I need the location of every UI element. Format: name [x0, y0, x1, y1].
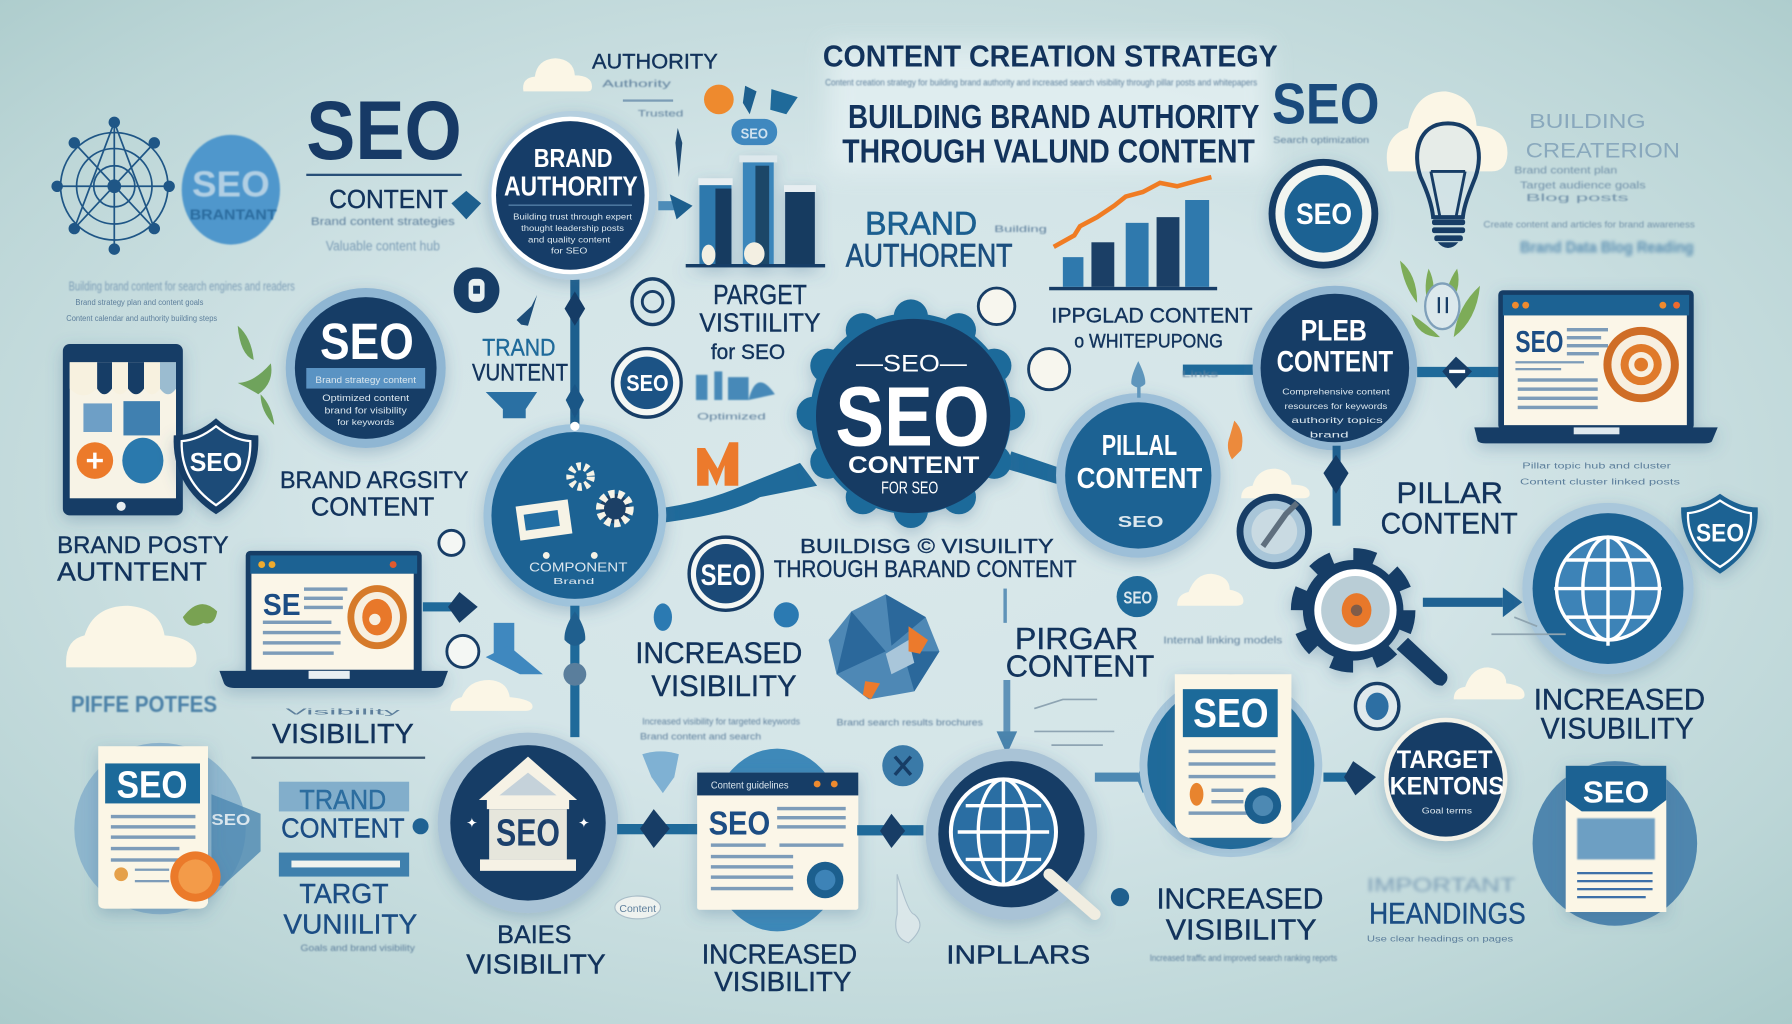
text block: authority: Trusted	[638, 109, 683, 119]
badge: SEO target ring	[1269, 159, 1378, 269]
text block: trand vontent: VUNTENT	[472, 360, 568, 387]
badge: SEO left: brand for visibility	[325, 406, 407, 416]
text block: building creation faded: Target audience goals	[1520, 181, 1646, 192]
text block: whitepapers: IPPGLAD CONTENT	[1051, 302, 1253, 327]
arrow: gear to globe	[1423, 587, 1522, 617]
text block: increased visibility middle: VISIBILITY	[651, 670, 797, 703]
text block: pirgar content	[1006, 621, 1154, 684]
icon: web doc centre: Content guidelines	[711, 781, 789, 792]
icon: plant emblem	[1400, 261, 1480, 337]
text block: increased visibility lower right	[1150, 884, 1338, 963]
badge: globe	[1522, 503, 1694, 674]
text block: increased visibility bottom: INCREASED	[702, 938, 857, 969]
icon: network wheel	[51, 117, 175, 255]
text block: pillar content right: CONTENT	[1381, 508, 1518, 541]
icon: SEO report on circle: SEO	[1193, 690, 1269, 736]
badge: pillar content: SEO	[1118, 514, 1163, 531]
text block: left intro: Content calendar and authority building steps	[66, 314, 217, 323]
text block: brand posty: AUTNTENT	[57, 557, 207, 587]
badge: pled content	[1253, 286, 1417, 450]
icon: SEO shield left	[174, 418, 258, 514]
badge: pled content: resources for keywords	[1285, 401, 1387, 411]
badge: component hub: Brand	[553, 577, 594, 586]
connector: top vertical	[565, 274, 585, 434]
icon: laptop right: SEO	[1515, 324, 1563, 359]
text block: baies visibility	[466, 921, 606, 980]
text block: small shard note: Brand search results brochures	[837, 718, 983, 728]
badge: central SEO: CONTENT	[848, 452, 980, 479]
arrow: vertical to globe	[997, 589, 1017, 754]
text block: brand authorent	[846, 205, 1047, 273]
icon: SEO doc left	[74, 743, 261, 914]
icon: blue SEO blob: SEO	[192, 164, 270, 205]
icon: SEO shield right: SEO	[1696, 520, 1744, 548]
icon: SEO small blue circle: SEO	[1123, 587, 1152, 607]
heading: SEO content	[306, 83, 462, 253]
text block: inpllars: INPLLARS	[946, 939, 1090, 969]
badge: brand authority: and quality content	[528, 235, 611, 244]
text block: building creation faded: Brand Data Blog Reading	[1520, 240, 1694, 257]
text block: building creation faded: Create content and articles for brand awareness	[1483, 219, 1695, 229]
title block: CONTENT CREATION STRATEGY	[823, 38, 1278, 73]
arrow: report to target	[1323, 761, 1376, 795]
text block: increased visibility right: INCREASED	[1534, 684, 1705, 717]
text block: brand authorent: AUTHORENT	[846, 237, 1013, 273]
icon: orange drop	[1228, 421, 1242, 459]
chart: pillars	[686, 155, 825, 267]
badge: pillar content: PILLAL	[1102, 430, 1177, 462]
badge: SEO left: for keywords	[337, 418, 394, 427]
badge: SEO bank: ✦	[466, 815, 478, 830]
arrow: bank to doc	[617, 809, 703, 848]
icon: SEO doc left: SEO	[117, 764, 187, 806]
icon: blue SEO blob: BRANTANT	[190, 207, 277, 223]
text block: whitepapers: o WHITEPUPONG	[1074, 330, 1223, 352]
badge: target keywords: TARGET	[1397, 746, 1493, 774]
panel: trand content: TRAND	[299, 784, 386, 815]
heading: SEO content: CONTENT	[329, 184, 448, 214]
icon: tiny side shape	[896, 874, 920, 943]
text block: brand authorent: Building	[994, 224, 1047, 234]
title block: THROUGH VALUND CONTENT	[842, 133, 1255, 170]
text block: increased visibility bottom	[702, 938, 857, 997]
badge: pled content: authority topics	[1291, 415, 1383, 425]
title block: BUILDING BRAND AUTHORITY	[848, 99, 1259, 136]
badge: SEO left: Optimized content	[322, 393, 410, 403]
icon: lightbulb with cloud	[1387, 91, 1507, 248]
text block: increased visibility middle: Brand content and search	[640, 731, 761, 741]
badge: top right of centre circles	[978, 288, 1070, 390]
text block: pillar small tab: Links	[1182, 369, 1219, 379]
badge: pled content: PLEB	[1301, 315, 1367, 348]
text block: headings: Use clear headings on pages	[1367, 935, 1513, 944]
icon: laptop right	[1474, 290, 1718, 443]
text block: brand argsity: CONTENT	[311, 491, 434, 521]
text block: parget visibility: PARGET	[713, 279, 807, 310]
text block: increased visibility bottom: VISIBILITY	[714, 966, 851, 997]
arrow: pled to laptop	[1417, 357, 1499, 389]
badge: SEO bank: SEO	[496, 812, 560, 854]
title glow	[829, 46, 1269, 171]
badge: brand authority: for SEO	[551, 247, 587, 256]
text block: brand posty: BRAND POSTY	[57, 532, 229, 559]
text block: increased visibility lower right: Increased traffic and improved search ranking reports	[1150, 953, 1338, 963]
text block: building visibility: THROUGH BARAND CONTENT	[774, 556, 1077, 583]
text block: increased visibility middle	[635, 637, 802, 741]
icon: small circles	[439, 530, 479, 667]
icon: web doc centre	[697, 749, 858, 931]
arrow: globe to report	[1095, 766, 1154, 793]
text block: brand authorent: BRAND	[865, 205, 977, 241]
badge: central SEO	[797, 299, 1025, 528]
icon: cloud centre	[1177, 574, 1243, 606]
badge: central SEO: SEO	[835, 369, 990, 464]
text block: brand argsity	[280, 467, 469, 521]
badge: brand authority	[488, 111, 657, 280]
text block: targt vuniility: VUNIILITY	[283, 909, 417, 940]
text block: baies visibility: BAIES	[497, 921, 571, 949]
icon: small pin	[1111, 888, 1129, 906]
icon: small navy circle	[454, 267, 499, 313]
icon: small bubble: Content	[619, 904, 656, 915]
icon: SEO small blue circle	[1117, 576, 1158, 617]
text block: trand vontent: TRAND	[482, 334, 555, 361]
icon: SEO shield right	[1681, 494, 1758, 574]
icon: SEO doc right	[1533, 761, 1697, 926]
text block: baies visibility: VISIBILITY	[466, 949, 606, 980]
badge: SEO circle small: SEO	[701, 559, 751, 592]
icon: small sketch	[1491, 617, 1566, 634]
icon: small bubble	[615, 896, 661, 919]
text block: parget visibility: for SEO	[711, 339, 785, 364]
icon: leaf left	[183, 604, 217, 626]
text block: left intro: Building brand content for search engines and readers	[69, 279, 295, 293]
icon: gear magnifier	[1299, 557, 1447, 686]
icon: tablet storefront	[63, 344, 183, 515]
badge: pled content: Comprehensive content	[1282, 386, 1390, 396]
connector: hub down	[563, 606, 586, 737]
text block: small centre note: Internal linking models	[1163, 635, 1282, 646]
badge: target keywords: Goal terms	[1422, 807, 1472, 816]
icon: laptop left: SE	[263, 587, 301, 622]
text block: left intro	[66, 279, 295, 323]
badge: pillar content	[1056, 393, 1221, 558]
icon: small blue circle	[882, 745, 923, 786]
icon: cloud left	[66, 606, 197, 667]
badge: SEO circle small	[689, 537, 762, 610]
text block: increased visibility middle: Increased visibility for targeted keywords	[642, 717, 800, 727]
badge: target keywords: KENTONS	[1390, 772, 1504, 800]
badge: brand authority: AUTHORITY	[504, 170, 638, 201]
icon cluster: small marks: SEO	[741, 126, 768, 142]
heading: SEO content: SEO	[306, 83, 462, 177]
icon: blue SEO blob	[182, 135, 280, 245]
icon cluster: small marks	[675, 85, 798, 177]
badge: pled content: CONTENT	[1277, 345, 1393, 378]
text block: pillar content right: Pillar topic hub and cluster	[1522, 462, 1671, 471]
icon: shard sphere	[829, 594, 939, 699]
text block: pirgar content: CONTENT	[1006, 649, 1154, 684]
title block: Content creation strategy for building brand authority and increased search visibility through pillar posts and whitepapers	[825, 78, 1258, 88]
text block: whitepapers	[1051, 302, 1253, 352]
text block: pirgar content: PIRGAR	[1015, 621, 1138, 656]
badge: globe magnifier	[926, 749, 1097, 920]
badge: SEO target ring: SEO	[1296, 198, 1352, 231]
text block: targt vuniility: TARGT	[299, 878, 389, 909]
connector: hub to centre	[657, 463, 817, 523]
badge: SEO left: SEO	[320, 312, 414, 370]
text block: building visibility	[774, 535, 1077, 583]
badge: SEO bank	[438, 733, 618, 913]
icon: key circle	[1355, 683, 1399, 729]
connector: pillar to pled	[1183, 365, 1257, 375]
text block: parget visibility: VISTIILITY	[699, 307, 821, 337]
text block: brand argsity: BRAND ARGSITY	[280, 467, 469, 494]
badge: brand authority: thought leadership posts	[521, 224, 624, 233]
text block: increased visibility lower right: INCREASED	[1157, 884, 1323, 916]
text block: increased visibility right: VISUBILITY	[1541, 712, 1694, 745]
text block: brand posty	[57, 532, 229, 587]
arrow: content to brand authority	[451, 191, 481, 219]
icon: SEO doc left: SEO	[211, 812, 250, 829]
badge: pillar content: CONTENT	[1077, 463, 1203, 495]
arrow: doc to globe	[857, 814, 923, 848]
text block: authority: AUTHORITY	[592, 49, 718, 74]
text block: pillar content right	[1381, 462, 1680, 541]
text block: parget visibility	[699, 279, 821, 364]
badge: SEO bank: ✦	[578, 815, 590, 830]
badge: SEO left	[286, 288, 446, 448]
connector: pled down	[1323, 446, 1349, 526]
badge: brand authority: Building trust through expert	[513, 212, 633, 221]
badge: central SEO: —SEO—	[856, 350, 967, 377]
icon: web doc centre: SEO	[709, 805, 770, 842]
badge: central SEO: FOR SEO	[881, 478, 938, 498]
heading: SEO content: Valuable content hub	[326, 238, 440, 253]
text block: headings: IMPORTANT	[1367, 874, 1516, 896]
text block: building creation faded	[1483, 110, 1695, 257]
text block: targt vuniility	[283, 878, 417, 953]
icon: hat shape	[486, 392, 537, 418]
icon: leaves	[238, 322, 274, 425]
text block: left intro: Brand strategy plan and content goals	[75, 298, 203, 307]
text block: building visibility: BUILDISG © VISUILITY	[800, 535, 1054, 558]
text block: increased visibility middle: INCREASED	[635, 637, 802, 670]
icon: email circle	[632, 279, 673, 325]
text block: building creation faded: BUILDING	[1529, 110, 1646, 133]
badge: SEO ring: SEO	[626, 370, 669, 396]
text block: increased visibility right	[1534, 684, 1705, 745]
text block: building creation faded: Brand content plan	[1514, 166, 1617, 177]
badge: component hub	[483, 422, 666, 607]
badge: SEO ring	[613, 349, 681, 417]
SEO heading top right: Search optimization	[1273, 135, 1369, 145]
text block: building creation faded: CREATERION	[1526, 138, 1680, 163]
icon: blue pattern	[696, 371, 775, 421]
text block: headings: HEANDINGS	[1369, 897, 1526, 930]
icon: cloud top	[523, 58, 592, 91]
panel: trand content: CONTENT	[281, 813, 405, 844]
text block: pillar content right: Content cluster linked posts	[1520, 478, 1680, 487]
icon: SEO shield left: SEO	[190, 447, 242, 477]
panel: trand content	[279, 782, 409, 877]
heading: SEO content: Brand content strategies	[311, 216, 455, 228]
icon: SEO report on circle	[1139, 674, 1322, 857]
icon: blue trophy	[486, 623, 543, 674]
marker: pill	[413, 818, 429, 834]
badge: pled content: brand	[1310, 430, 1349, 440]
text block: visibility left: Visibility	[286, 707, 400, 716]
text block: trand vontent	[472, 334, 568, 387]
title block	[823, 38, 1278, 170]
badge: component hub: COMPONENT	[529, 560, 628, 574]
text block: authority: Authority	[602, 79, 672, 90]
connector: center to pillar	[1006, 451, 1069, 486]
icon: cloud lower	[450, 680, 533, 711]
icon: blue pattern: Optimized	[697, 411, 766, 421]
text block: authority	[592, 49, 718, 119]
badge: brand authority: BRAND	[534, 143, 613, 173]
arrow: brand authority to pillars	[658, 194, 693, 219]
text block: visibility left	[251, 707, 425, 759]
chart: growth bars	[1049, 177, 1217, 290]
icon: faint sketch	[1034, 699, 1114, 745]
text block: increased visibility lower right: VISIBILITY	[1166, 914, 1317, 946]
text block: building creation faded: Blog posts	[1526, 193, 1629, 204]
badge: target keywords	[1384, 718, 1507, 841]
text block: faded pifee poties: PIFFE POTFES	[71, 691, 217, 717]
icon: small sprout	[517, 295, 537, 326]
icon: small cloud mid	[1241, 469, 1310, 498]
badge: SEO left: Brand strategy content	[315, 375, 417, 385]
icon: blue funnel	[642, 751, 679, 793]
icon: wrench badge	[1237, 494, 1312, 569]
icon: pin over pillar	[1131, 361, 1145, 398]
text block: visibility left: VISIBILITY	[272, 718, 414, 749]
SEO heading top right: SEO	[1272, 72, 1379, 136]
text block: pillar content right: PILLAR	[1397, 477, 1503, 510]
icon: SEO doc right: SEO	[1583, 774, 1649, 809]
icon: small blue tiny	[654, 602, 799, 631]
text block: targt vuniility: Goals and brand visibility	[301, 943, 415, 953]
text block: headings	[1367, 874, 1526, 944]
arrow: laptop to hub	[423, 592, 478, 623]
icon: orange M	[697, 442, 738, 486]
icon: laptop left	[219, 551, 448, 688]
icon: cloud right	[1454, 667, 1525, 699]
